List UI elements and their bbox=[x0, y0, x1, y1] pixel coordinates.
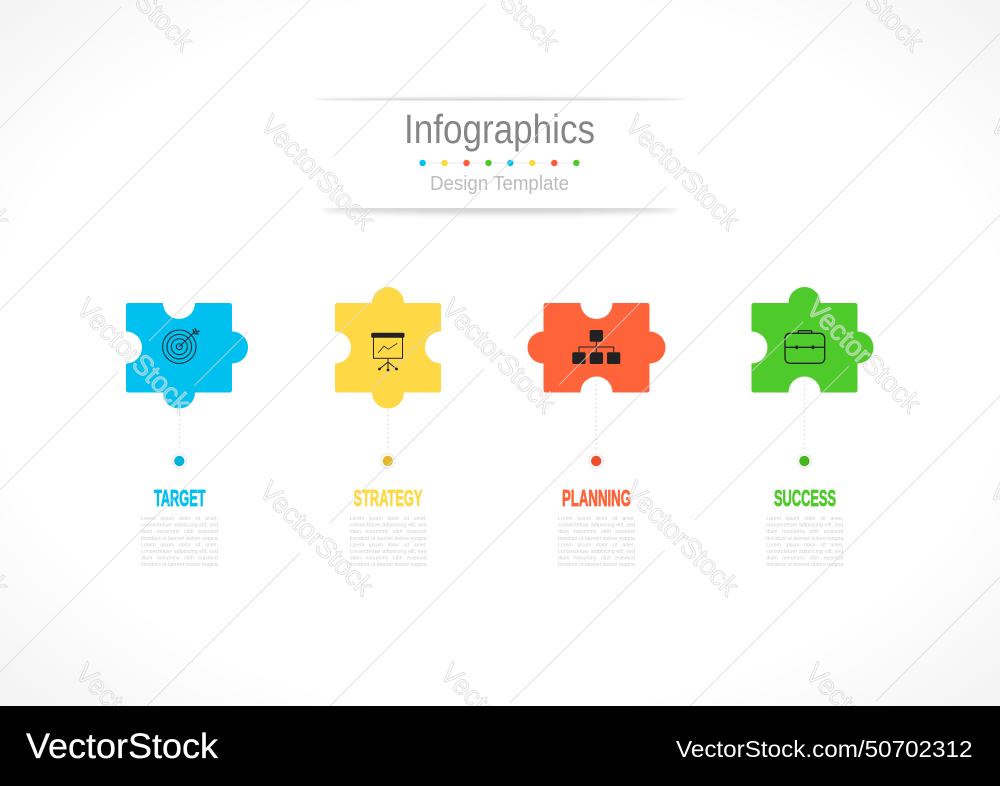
body text: success bbox=[766, 516, 843, 568]
connector: success bbox=[803, 380, 805, 450]
body text: target: consectetuer adipiscing elit, sed bbox=[141, 523, 218, 529]
marker dot: target bbox=[172, 454, 187, 468]
watermark text: VectorStock bbox=[70, 292, 198, 419]
puzzle piece: planning bbox=[528, 303, 666, 392]
body text: strategy: diam nonummy nibh euismod bbox=[350, 556, 427, 562]
puzzle piece: strategy bbox=[335, 287, 441, 408]
body text: strategy: tincidunt ut laoreet dolore magna bbox=[350, 562, 427, 568]
watermark text: VectorStock bbox=[799, 657, 927, 784]
column: planning bbox=[528, 303, 666, 568]
puzzle piece: success bbox=[752, 287, 874, 392]
body text: target: diam nonummy nibh euismod bbox=[141, 556, 218, 562]
heading: target: TARGET bbox=[154, 485, 206, 511]
body text: strategy bbox=[350, 516, 427, 568]
icon: target with arrow bbox=[163, 328, 200, 363]
body text: success: diam nonummy nibh euismod bbox=[766, 556, 843, 562]
body text: planning: Lorem ipsum dolor sit amet, bbox=[558, 542, 635, 548]
body text: strategy: diam nonummy nibh euismod bbox=[350, 529, 427, 535]
watermark text: VectorStock bbox=[800, 292, 928, 419]
connector: target bbox=[178, 410, 180, 450]
watermark text: VectorStock bbox=[435, 292, 563, 419]
marker dot: strategy bbox=[380, 454, 395, 468]
heading: success: SUCCESS bbox=[774, 485, 836, 511]
body text: planning: Lorem ipsum dolor sit amet, bbox=[558, 516, 635, 522]
column: success bbox=[752, 287, 874, 568]
marker dot: planning bbox=[589, 454, 604, 468]
connector: planning bbox=[595, 380, 597, 450]
body text: success: tincidunt ut laoreet dolore magna bbox=[766, 562, 843, 568]
body text: strategy: Lorem ipsum dolor sit amet, bbox=[350, 516, 427, 522]
body text: planning: consectetuer adipiscing elit, sed bbox=[558, 549, 635, 555]
heading: planning: PLANNING bbox=[562, 485, 631, 511]
body text: planning: consectetuer adipiscing elit, sed bbox=[558, 523, 635, 529]
footer logo: VectorStock bbox=[26, 727, 219, 766]
body text: strategy: Lorem ipsum dolor sit amet, bbox=[350, 542, 427, 548]
subtitle: Design Template bbox=[430, 173, 569, 195]
body text: planning: diam nonummy nibh euismod bbox=[558, 529, 635, 535]
body text: target bbox=[141, 516, 218, 568]
footer bar bbox=[0, 706, 1000, 786]
body text: target: tincidunt ut laoreet dolore magna bbox=[141, 562, 218, 568]
body text: target: tincidunt ut laoreet dolore magna bbox=[141, 536, 218, 542]
body text: planning: diam nonummy nibh euismod bbox=[558, 556, 635, 562]
watermark text: VectorStock bbox=[69, 657, 197, 784]
body text: success: consectetuer adipiscing elit, sed bbox=[766, 549, 843, 555]
icon: presentation board bbox=[372, 333, 404, 371]
body text: success: consectetuer adipiscing elit, sed bbox=[766, 523, 843, 529]
dotted colour divider bbox=[419, 160, 580, 166]
footer image id: VectorStock.com/50702312 bbox=[676, 736, 972, 762]
puzzle piece: target bbox=[126, 303, 248, 408]
body text: success: diam nonummy nibh euismod bbox=[766, 529, 843, 535]
body text: target: Lorem ipsum dolor sit amet, bbox=[141, 516, 218, 522]
panel: title card bbox=[300, 98, 700, 214]
watermark text: VectorStock bbox=[434, 657, 562, 784]
marker dot: success bbox=[797, 454, 812, 468]
body text: strategy: tincidunt ut laoreet dolore magna bbox=[350, 536, 427, 542]
watermark text: VectorStock bbox=[253, 475, 381, 602]
body text: success: tincidunt ut laoreet dolore magna bbox=[766, 536, 843, 542]
icon: briefcase bbox=[785, 331, 825, 363]
body text: success: Lorem ipsum dolor sit amet, bbox=[766, 516, 843, 522]
watermark text: VectorStock bbox=[254, 109, 382, 236]
body text: target: consectetuer adipiscing elit, sed bbox=[141, 549, 218, 555]
column: target bbox=[126, 303, 248, 568]
body text: planning: tincidunt ut laoreet dolore magna bbox=[558, 562, 635, 568]
body text: success: Lorem ipsum dolor sit amet, bbox=[766, 542, 843, 548]
watermark text: VectorStock bbox=[619, 109, 747, 236]
body text: planning: tincidunt ut laoreet dolore magna bbox=[558, 536, 635, 542]
icon: organisation chart bbox=[572, 330, 620, 364]
body text: strategy: consectetuer adipiscing elit, sed bbox=[350, 549, 427, 555]
watermark text: VectorStock bbox=[618, 475, 746, 602]
title: Infographics bbox=[404, 106, 595, 152]
body text: strategy: consectetuer adipiscing elit, sed bbox=[350, 523, 427, 529]
column: strategy bbox=[335, 287, 441, 568]
body text: target: Lorem ipsum dolor sit amet, bbox=[141, 542, 218, 548]
heading: strategy: STRATEGY bbox=[354, 485, 422, 511]
connector: strategy bbox=[387, 410, 389, 450]
body text: target: diam nonummy nibh euismod bbox=[141, 529, 218, 535]
body text: planning bbox=[558, 516, 635, 568]
